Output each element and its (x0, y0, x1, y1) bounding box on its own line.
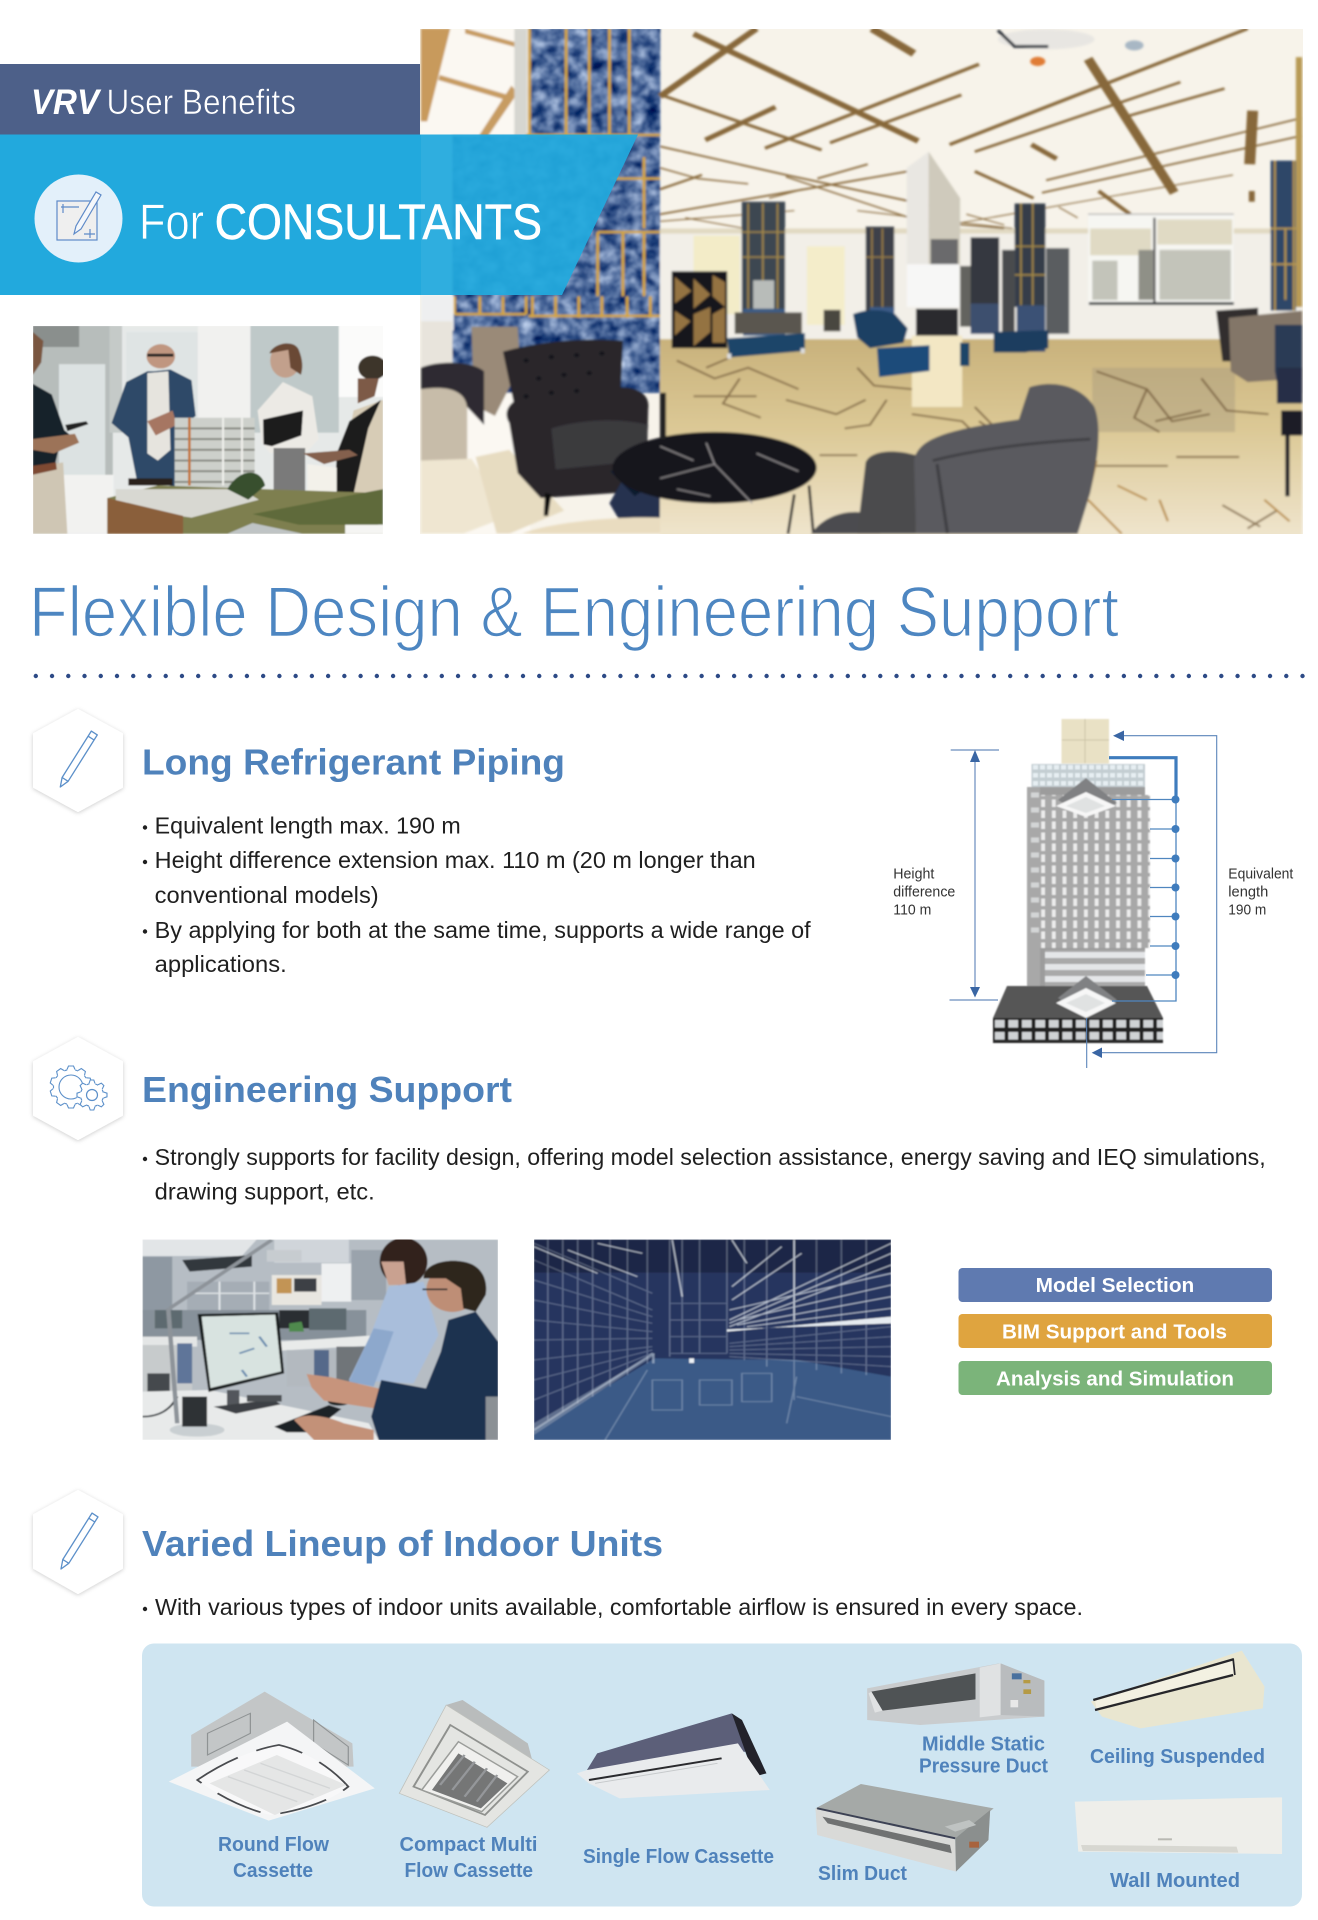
unit: Round Flow Cassette: Round Flow (218, 1834, 329, 1856)
label: equivalent length (1228, 866, 1294, 918)
diagram: refrigerant piping on a tower (893, 719, 1294, 1068)
label: equivalent length: length (1228, 884, 1268, 900)
body text: Strongly supports for facility design, offering model selection assistance, energy saving and IEQ simulations, (155, 1144, 1266, 1170)
body text: drawing support, etc. (155, 1178, 375, 1204)
band: VRV User Benefits: User Benefits (106, 83, 296, 122)
label: height difference: difference (893, 884, 955, 900)
tag: Model Selection: Model Selection (1036, 1275, 1194, 1297)
heading: Varied Lineup of Indoor Units (142, 1523, 663, 1564)
bullet list: Equivalent length max. 190 m (155, 813, 461, 839)
bullet list: By applying for both at the same time, supports a wide range of (155, 917, 811, 943)
unit: Compact Multi Flow Cassette: Flow Cassette (404, 1860, 533, 1882)
label: equivalent length: 190 m (1228, 901, 1266, 918)
unit: Ceiling Suspended: Ceiling Suspended (1090, 1746, 1265, 1768)
heading: Engineering Support (142, 1069, 512, 1110)
tag: Model Selection (958, 1268, 1272, 1302)
heading: Long Refrigerant Piping (142, 742, 565, 782)
icon: pencil in hexagon (34, 710, 122, 811)
unit: Wall Mounted (1075, 1797, 1282, 1892)
arrow: height difference (950, 750, 999, 1000)
section: Long Refrigerant Piping (34, 710, 811, 977)
unit: Compact Multi Flow Cassette (399, 1700, 549, 1882)
band: VRV User Benefits: VRV (31, 83, 102, 122)
piping (1109, 758, 1176, 1001)
icon: drawing board and pencil (34, 174, 122, 262)
panel: indoor units (142, 1644, 1302, 1906)
image: BIM wireframe (534, 1239, 891, 1440)
body text: With various types of indoor units available, comfortable airflow is ensured in every space. (155, 1594, 1083, 1620)
label: height difference (893, 866, 955, 918)
label: equivalent length: Equivalent (1228, 866, 1294, 882)
tag: BIM Support and Tools: BIM Support and Tools (1002, 1322, 1227, 1344)
bullet list: Height difference extension max. 110 m (20 m longer than (155, 847, 756, 873)
unit: Middle Static Pressure Duct: Middle Static (922, 1734, 1045, 1756)
main title: Flexible Design & Engineering Support (29, 574, 1119, 652)
unit: Compact Multi Flow Cassette: Compact Multi (400, 1834, 538, 1856)
label: height difference: 110 m (893, 901, 931, 918)
unit: Round Flow Cassette: Cassette (233, 1860, 313, 1882)
photo: consultants around architectural model (33, 326, 387, 534)
bullet list (143, 813, 811, 977)
band: VRV User Benefits (0, 64, 420, 135)
unit: Slim Duct (815, 1784, 994, 1885)
unit: Wall Mounted: Wall Mounted (1110, 1870, 1240, 1892)
bullet list: conventional models) (155, 882, 379, 908)
icon: gears in hexagon (34, 1038, 122, 1139)
label: height difference: Height (893, 866, 935, 882)
photo: hotel lobby interior (420, 29, 1303, 539)
unit: Single Flow Cassette: Single Flow Cassette (583, 1846, 774, 1868)
unit: Slim Duct: Slim Duct (818, 1863, 907, 1885)
arrow: equivalent length (1087, 730, 1217, 1068)
tag: Analysis and Simulation: Analysis and Simulation (996, 1368, 1234, 1390)
tag: Analysis and Simulation (958, 1361, 1272, 1395)
band: For Consultants (0, 134, 638, 295)
bullet list: applications. (155, 951, 287, 977)
icon: pencil in hexagon (34, 1491, 122, 1593)
unit: Round Flow Cassette (169, 1692, 375, 1882)
building (993, 719, 1163, 1043)
unit: Middle Static Pressure Duct: Pressure Duct (919, 1756, 1048, 1778)
unit: Ceiling Suspended (1090, 1651, 1265, 1768)
section: Varied Lineup of Indoor Units (34, 1491, 1083, 1620)
photo: engineers at a computer (142, 1238, 498, 1440)
body text (143, 1144, 1266, 1204)
unit: Single Flow Cassette (577, 1713, 774, 1868)
tag: BIM Support and Tools (958, 1314, 1272, 1348)
band: For Consultants: For (139, 194, 204, 250)
unit: Middle Static Pressure Duct (867, 1663, 1048, 1778)
section: Engineering Support (34, 1038, 1266, 1204)
band: For Consultants: CONSULTANTS (215, 194, 542, 250)
